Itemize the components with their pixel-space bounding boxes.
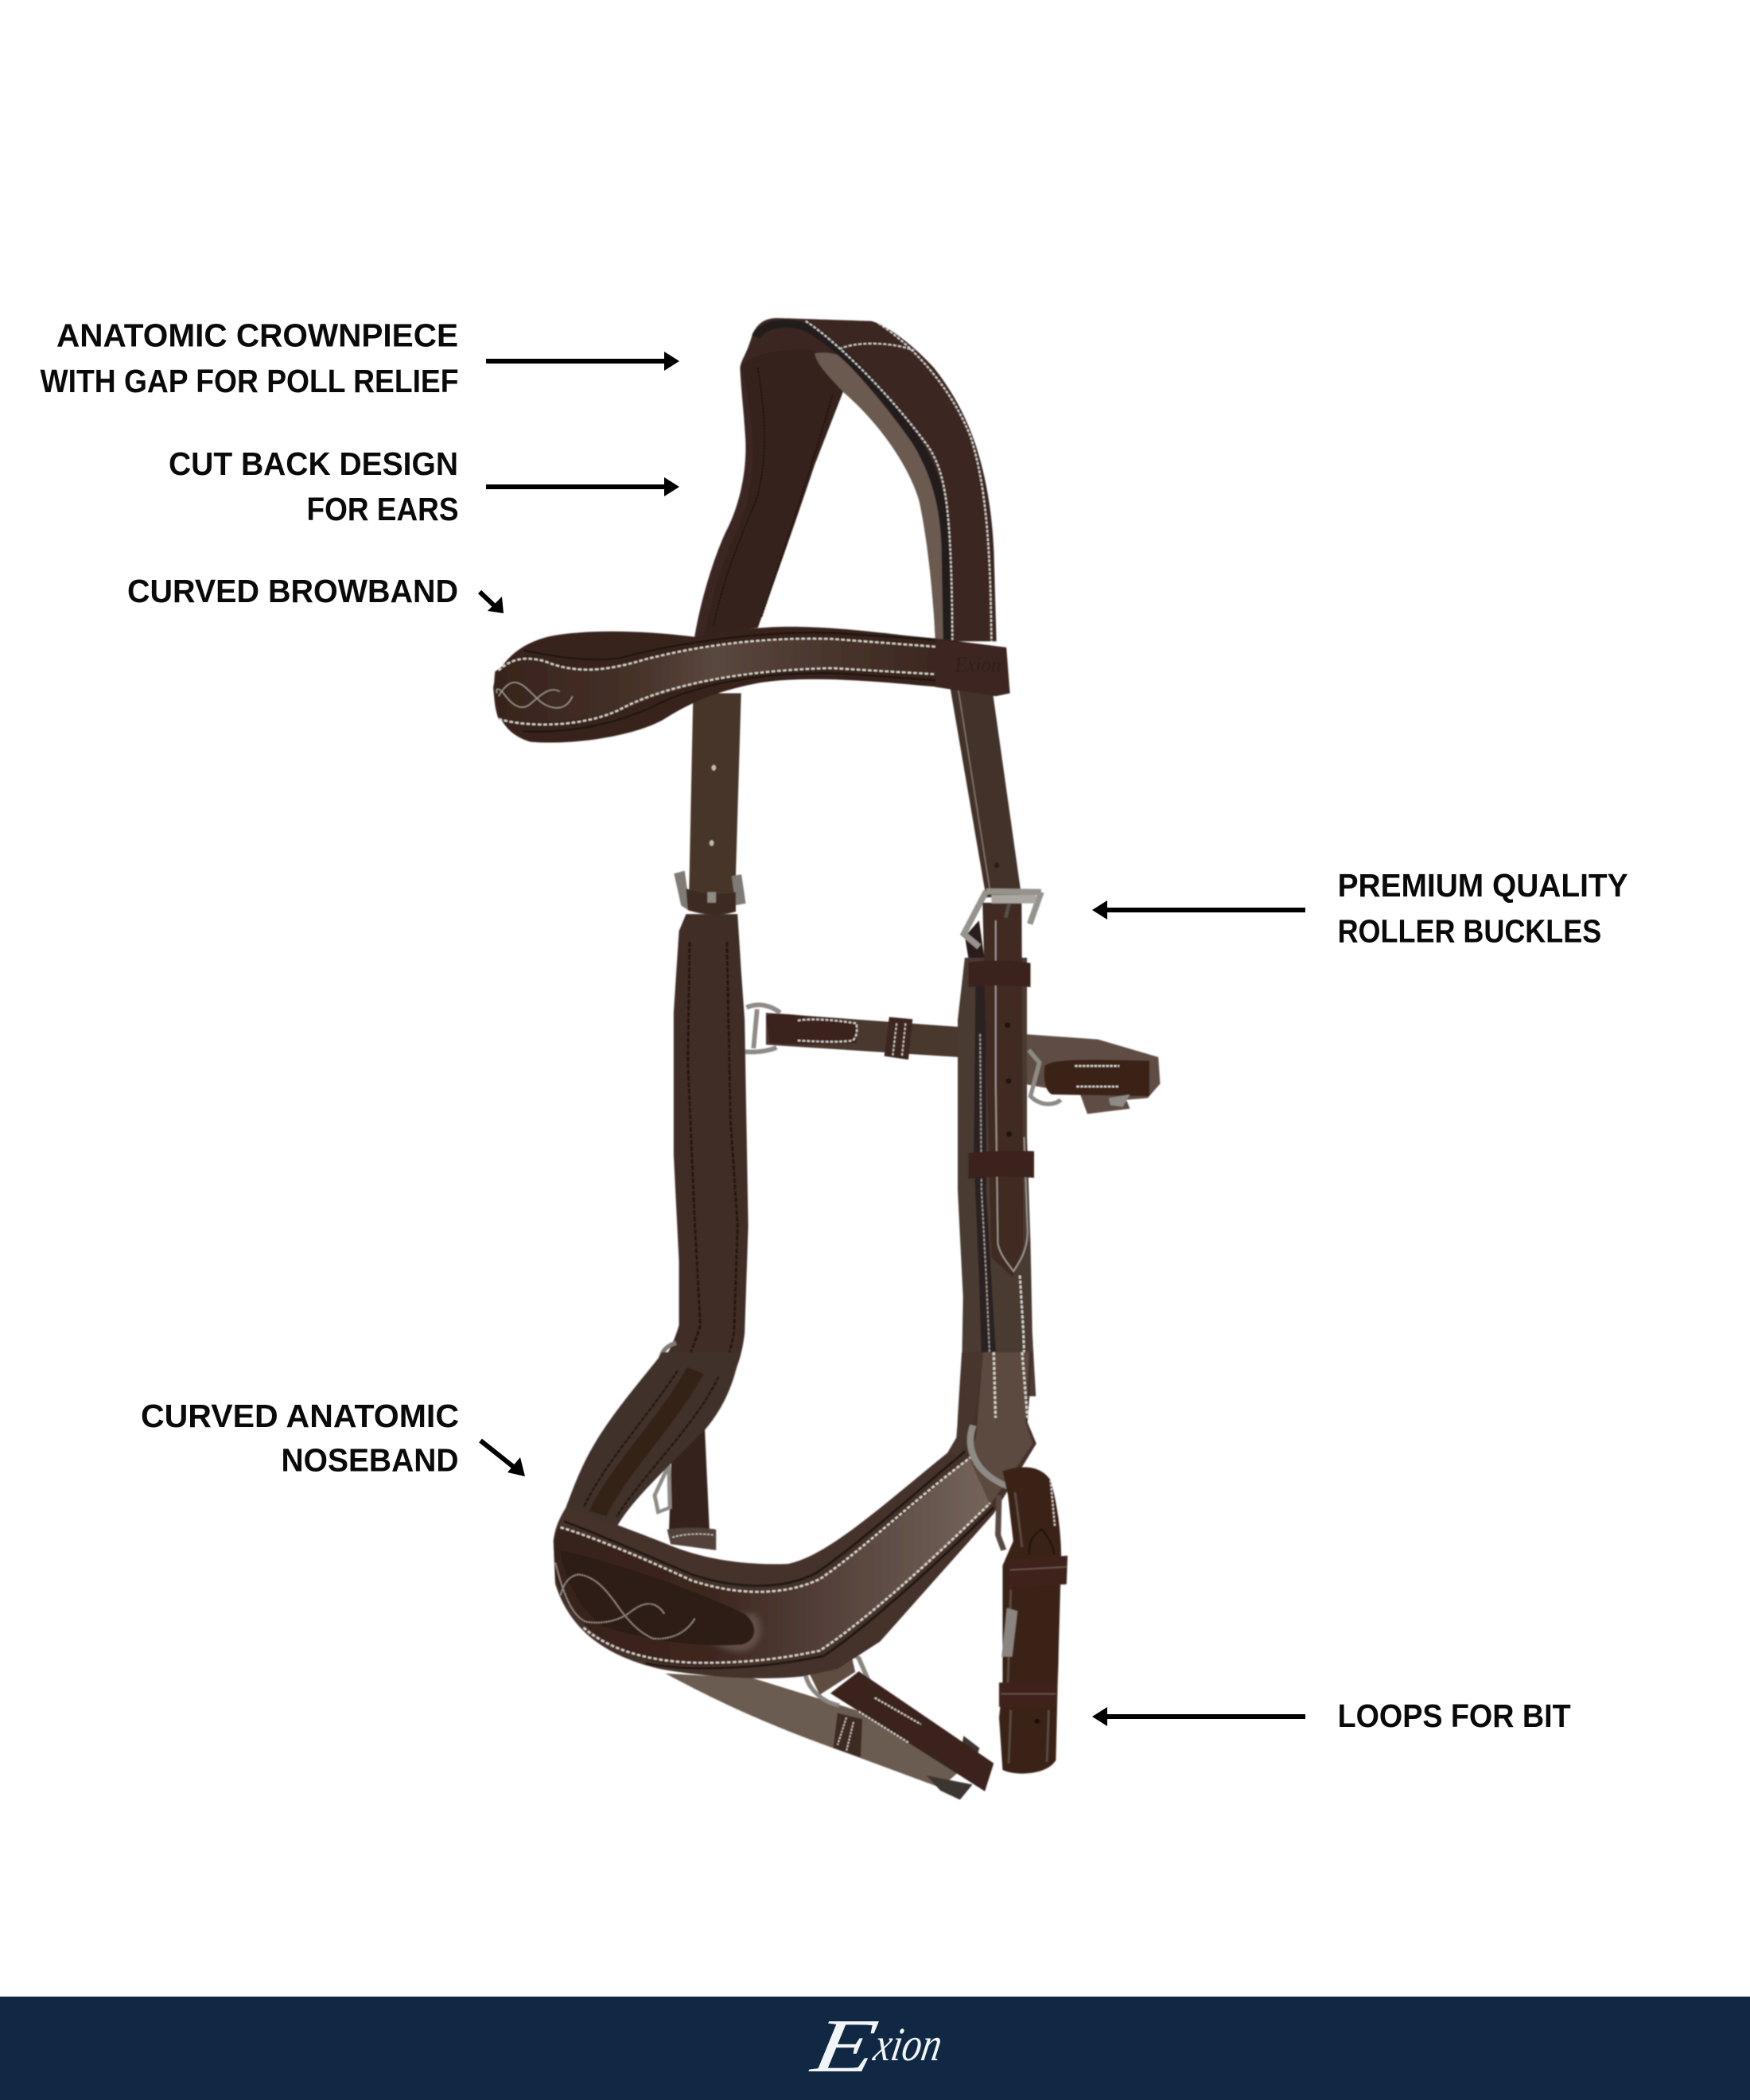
noseband silhouette — [554, 1352, 1036, 1678]
crownpiece silhouette — [694, 318, 997, 641]
buckle ends — [926, 1736, 979, 1800]
arrow: roller buckles — [1092, 900, 1305, 920]
D ring — [745, 1005, 780, 1052]
label: curved anatomic noseband — [141, 1398, 459, 1478]
label: anatomic crownpiece: ANATOMIC CROWNPIECE — [56, 317, 458, 353]
small lower ring on pad — [661, 1343, 676, 1368]
arrow: crownpiece — [486, 352, 679, 371]
footer logo: xion — [869, 2018, 947, 2071]
bit loop keepers — [999, 1556, 1068, 1707]
browband front leather — [494, 638, 937, 721]
roller buckle left — [674, 871, 745, 912]
label: premium quality roller buckles — [1338, 867, 1628, 950]
D ring on cheek — [970, 1425, 1009, 1487]
bit loop hole — [1034, 1719, 1040, 1724]
arrow: curved browband — [480, 592, 504, 613]
left cheek pad — [644, 914, 749, 1392]
keeper upper — [968, 961, 1031, 987]
billet holes — [1005, 1022, 1012, 1137]
arrow: curved anatomic noseband — [480, 1441, 525, 1476]
infinity stitching — [496, 682, 573, 708]
arrow: cut back design — [486, 477, 679, 496]
chin ring and tab — [806, 1646, 869, 1705]
padded lining — [705, 350, 843, 634]
infinity stitching — [555, 1562, 694, 1639]
footer logo: E — [805, 2004, 884, 2088]
browband silhouette — [493, 627, 1010, 743]
footer logo — [805, 2004, 947, 2088]
embossed panel — [667, 1611, 760, 1652]
buckle billet strap — [982, 903, 1024, 1278]
bit loop strap — [999, 1467, 1061, 1774]
bit loop buckle — [1001, 1608, 1017, 1657]
crownpiece — [694, 318, 997, 641]
right cheek body — [958, 958, 1036, 1396]
piping — [756, 324, 947, 640]
strap: left and centre straps behind the cheekpieces — [689, 693, 1160, 1114]
lower pad — [566, 1352, 740, 1526]
label: cut back design — [169, 445, 458, 527]
thong — [998, 1495, 1004, 1550]
left pad and buckle — [644, 871, 1149, 1396]
label: anatomic crownpiece: WITH GAP FOR POLL RELIEF — [40, 363, 458, 399]
strap: right cheek upper — [950, 686, 1021, 897]
label: curved anatomic noseband: CURVED ANATOMIC — [141, 1398, 459, 1434]
browband — [493, 627, 1010, 743]
crownpiece stitching — [806, 321, 991, 641]
bridle illustration — [493, 318, 1160, 1800]
throatlatch ring and loop — [1029, 1050, 1060, 1104]
lower strap flap — [830, 1671, 994, 1791]
grey lining edge — [815, 352, 950, 640]
arrow: loops for bit — [1092, 1707, 1305, 1726]
label: curved browband: CURVED BROWBAND — [127, 573, 458, 609]
cheek lower leather — [969, 1352, 1032, 1504]
centre strap keeper — [885, 1017, 912, 1060]
label: premium quality roller buckles: ROLLER BUCKLES — [1338, 913, 1601, 950]
label: cut back design: CUT BACK DESIGN — [169, 445, 458, 482]
noseband piping — [564, 1451, 994, 1668]
label: premium quality roller buckles: PREMIUM QUALITY — [1338, 867, 1628, 904]
label: anatomic crownpiece — [40, 317, 458, 399]
back strap and buckle — [669, 1419, 710, 1535]
roller buckle right — [965, 920, 984, 958]
label: curved anatomic noseband: NOSEBAND — [282, 1441, 458, 1478]
keeper lower — [968, 1151, 1034, 1179]
browband piping — [523, 632, 935, 732]
strap keeper — [833, 1713, 862, 1757]
label: cut back design: FOR EARS — [307, 491, 458, 527]
lower strap — [665, 1674, 969, 1787]
noseband assembly — [554, 1352, 1068, 1800]
footer band — [0, 1997, 1750, 2100]
loop highlights — [1008, 1492, 1048, 1764]
noseband stitching — [561, 1457, 990, 1662]
centre strap loop — [766, 1013, 857, 1044]
browband stitching — [499, 639, 937, 725]
noseband leather face — [554, 1457, 990, 1665]
embossed logo: Exion — [955, 653, 1001, 677]
label: loops for bit: LOOPS FOR BIT — [1338, 1698, 1571, 1734]
